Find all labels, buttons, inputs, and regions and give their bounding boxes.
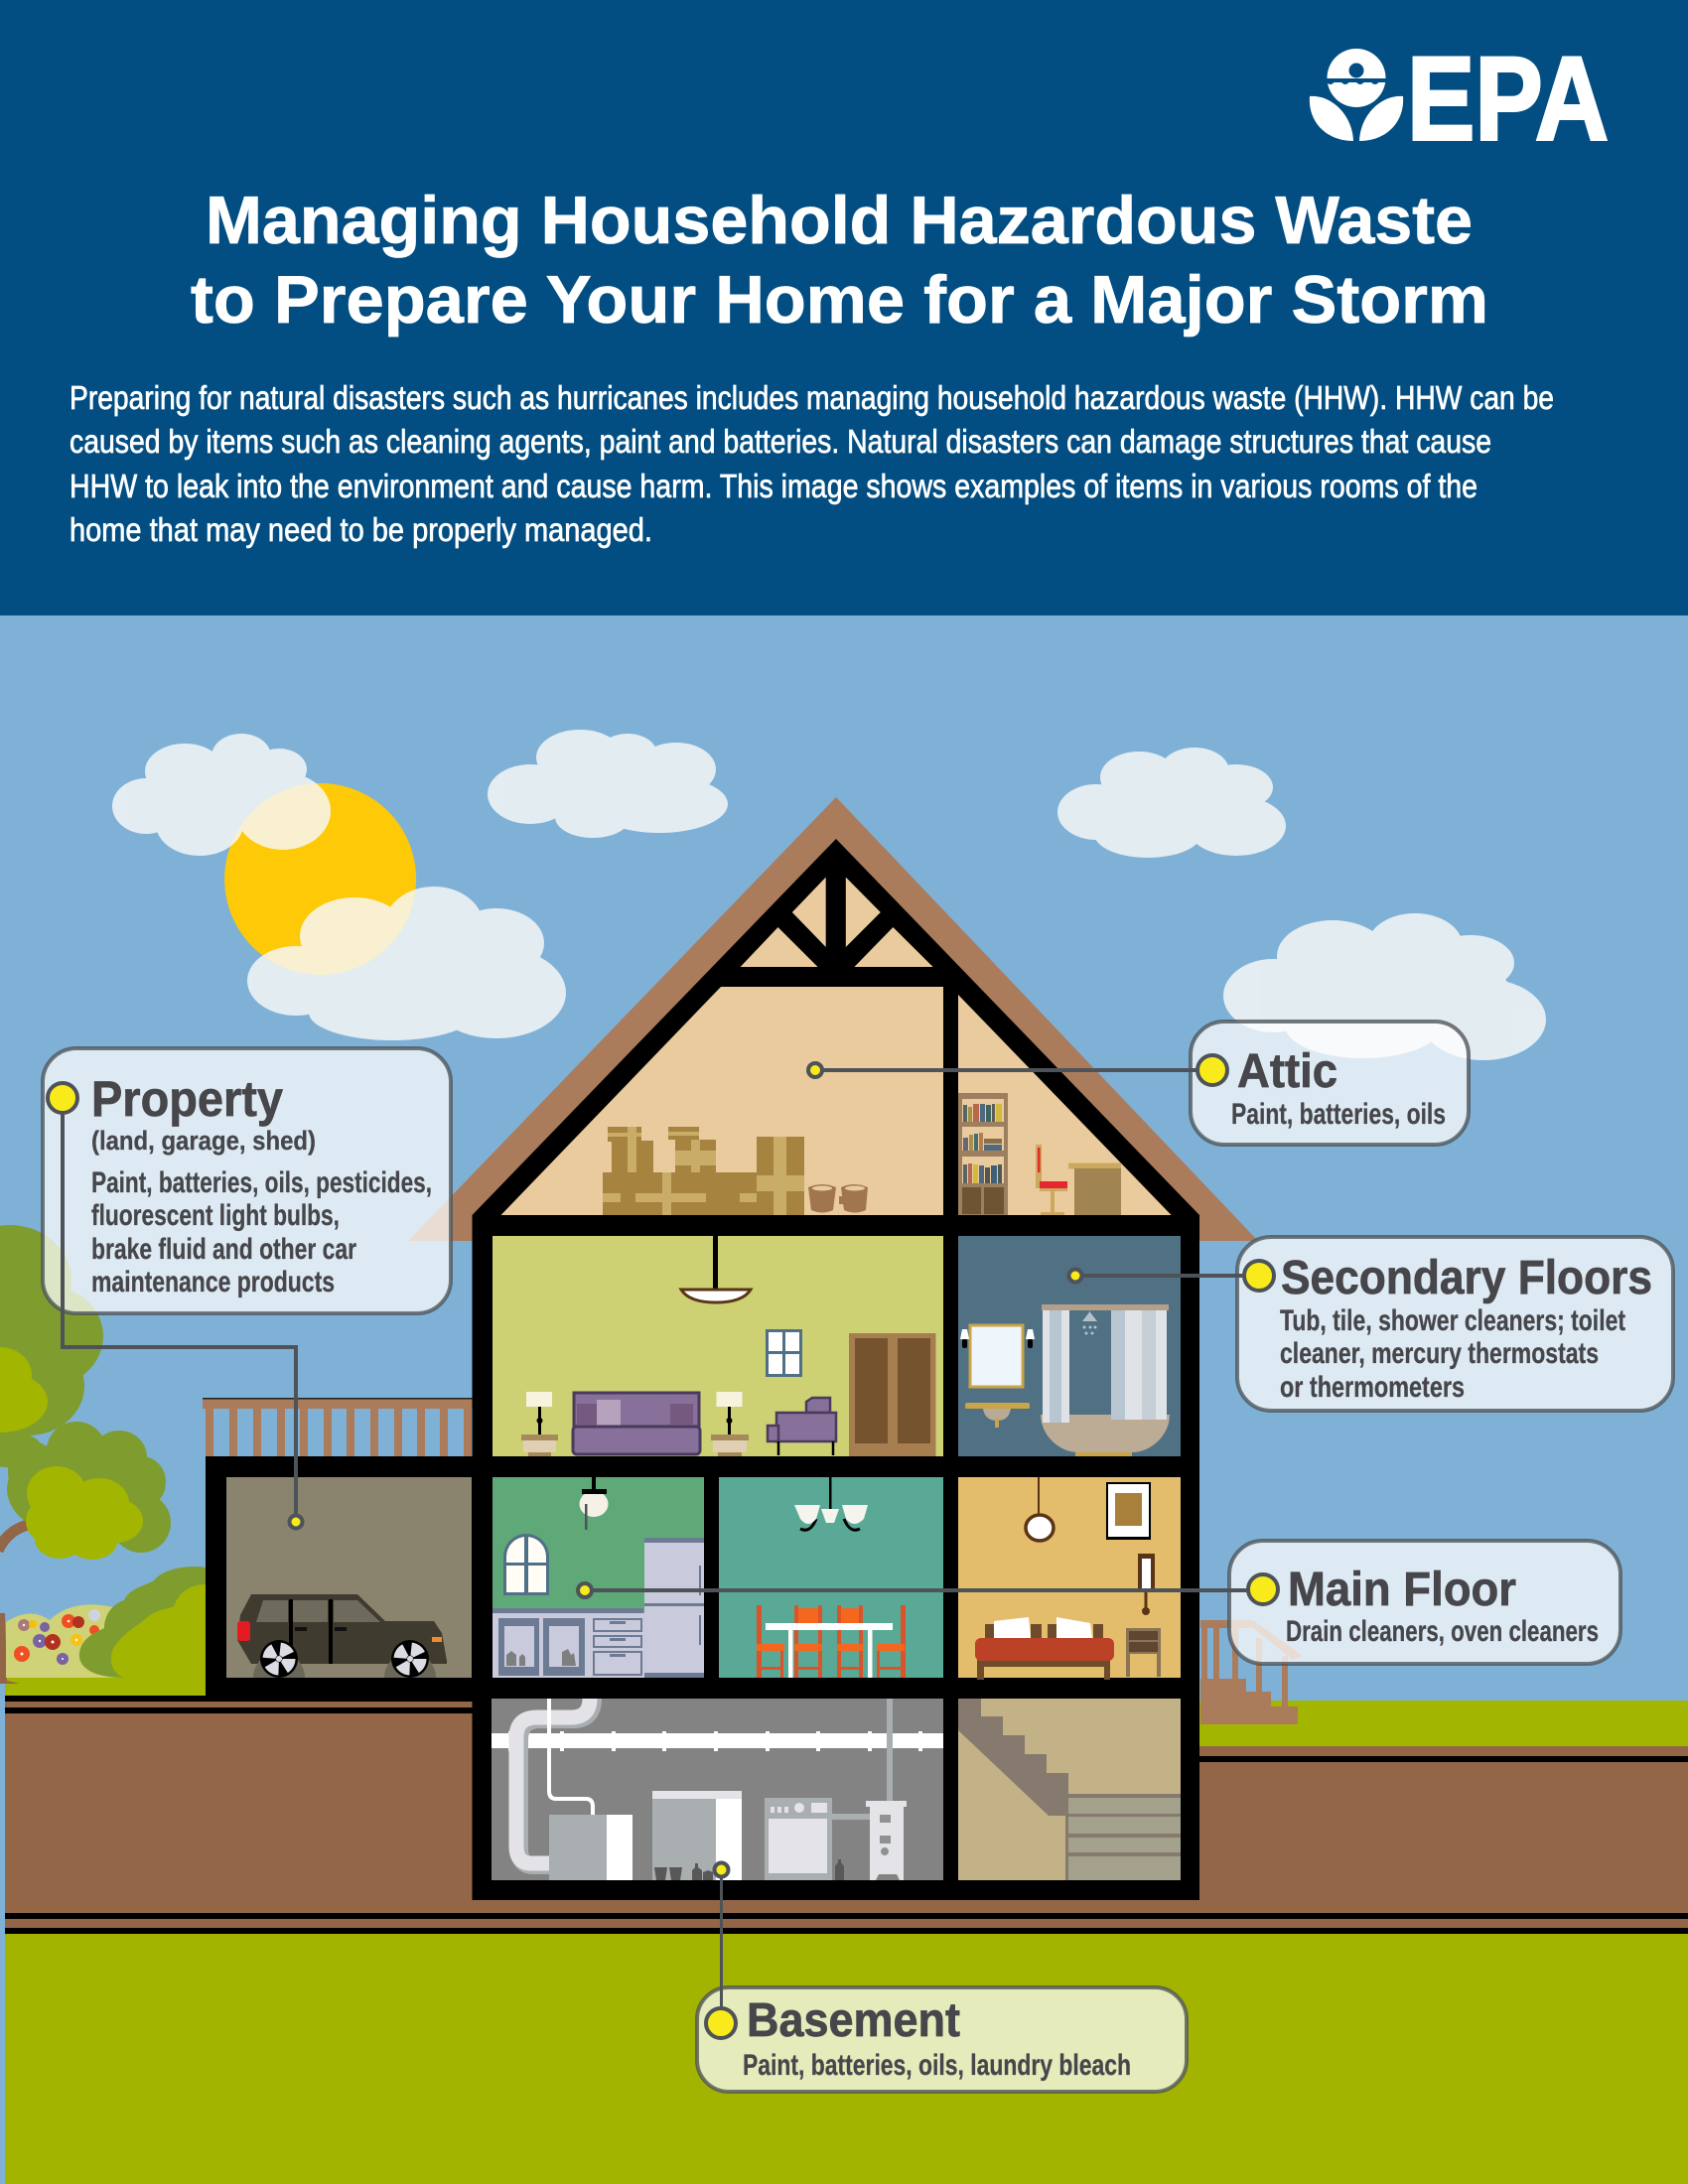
- callout: main floor: [1229, 1541, 1620, 1664]
- icon: EPA flower: [1310, 49, 1403, 141]
- callout: attic: [1191, 1022, 1469, 1145]
- icon: paint cans: [808, 1184, 868, 1213]
- callout items: [1280, 1304, 1625, 1404]
- flowers: [14, 1609, 100, 1665]
- room: basement utility: [492, 1699, 943, 1880]
- title: to Prepare Your Home for a Major Storm: [191, 262, 1488, 338]
- callout heading: Secondary Floors: [1281, 1252, 1652, 1304]
- tree: [0, 1225, 171, 1560]
- callout items: Paint, batteries, oils, pesticides,: [91, 1166, 432, 1199]
- cloud: lower over sun: [247, 887, 566, 1040]
- car body: [237, 1594, 447, 1664]
- dining chairs: [757, 1605, 906, 1678]
- callout items: Paint, batteries, oils, laundry bleach: [743, 2049, 1131, 2082]
- truss panels: [741, 878, 933, 967]
- closet doors: [849, 1333, 935, 1456]
- armchair: [768, 1398, 836, 1455]
- storage cabinet: [652, 1791, 742, 1880]
- room: living room: [492, 1236, 943, 1456]
- callout dot: [1197, 1055, 1227, 1085]
- wheels: [253, 1640, 436, 1678]
- dining table: [766, 1623, 893, 1678]
- desk: [1068, 1163, 1121, 1215]
- household chemical containers: [654, 1859, 844, 1880]
- callout items: fluorescent light bulbs,: [91, 1199, 340, 1232]
- property connector line: [63, 1114, 296, 1515]
- garage railing: [203, 1398, 473, 1457]
- water heater: [549, 1815, 633, 1880]
- marker: bathroom: [1068, 1269, 1082, 1283]
- porch stairs: [1200, 1620, 1303, 1724]
- intro paragraph: [70, 379, 1554, 548]
- cloud: right: [1223, 913, 1546, 1060]
- EPA logo: [1310, 32, 1609, 165]
- bed: [6, 1604, 139, 1678]
- right lawn: [1196, 1701, 1688, 1750]
- callout heading: Attic: [1237, 1045, 1337, 1098]
- wall thermostat: [1138, 1554, 1155, 1615]
- garage walls: [206, 1456, 474, 1696]
- nightstand: [1126, 1628, 1161, 1677]
- large duct: [516, 1699, 593, 1865]
- house structure: [206, 839, 1199, 1900]
- marker: basement: [715, 1862, 729, 1876]
- callout items: maintenance products: [91, 1266, 335, 1298]
- lower trunk: [0, 1613, 20, 1684]
- lower canopy: [7, 1422, 171, 1553]
- room: kitchen: [492, 1477, 704, 1678]
- bathtub: [1041, 1415, 1170, 1456]
- wall sconces: [960, 1329, 1035, 1348]
- side table lamp left: [521, 1392, 558, 1456]
- callout items: or thermometers: [1280, 1371, 1465, 1404]
- callout dot: [706, 2008, 736, 2038]
- lower canopy highlight: [26, 1466, 143, 1560]
- window: [766, 1329, 802, 1377]
- mirror: [970, 1325, 1023, 1387]
- sky background: [0, 614, 1688, 2184]
- room: dining room: [719, 1477, 943, 1678]
- cloud: above sun: [112, 734, 331, 856]
- soil lines: [5, 1696, 1688, 1934]
- room: bedroom: [958, 1477, 1181, 1680]
- door lines: [289, 1599, 347, 1664]
- foreground lawn: [5, 1934, 1688, 2184]
- ceiling light: [681, 1236, 751, 1302]
- ground: soil and grass: [5, 1696, 1688, 2184]
- room: attic office: [958, 995, 1172, 1215]
- sun: [224, 783, 416, 975]
- icon: car: [237, 1594, 447, 1678]
- title: [191, 183, 1488, 338]
- intro paragraph: home that may need to be properly managed.: [70, 511, 652, 548]
- secondary floors connector line: [1082, 1274, 1243, 1278]
- callout: property: [43, 1048, 451, 1313]
- car windows: [256, 1600, 380, 1622]
- roof: [408, 797, 1258, 1241]
- house walls: [473, 839, 1199, 1900]
- callout items: [91, 1166, 432, 1298]
- upper canopy highlight: [0, 1347, 48, 1433]
- furnace: [866, 1699, 907, 1880]
- chandelier: [794, 1477, 868, 1530]
- callout: basement: [697, 1987, 1187, 2092]
- shower head: [1082, 1310, 1097, 1334]
- callout subheading: (land, garage, shed): [91, 1126, 316, 1156]
- cloud: upper middle: [488, 730, 728, 838]
- cabinets: [492, 1608, 644, 1678]
- hanging lamp: [1026, 1477, 1054, 1541]
- callout items: cleaner, mercury thermostats: [1280, 1337, 1599, 1370]
- arched window: [503, 1534, 549, 1595]
- white beam: [492, 1731, 943, 1751]
- callout dot: [1244, 1261, 1274, 1291]
- ground grass left: [5, 1676, 209, 1700]
- marker: garage: [290, 1515, 302, 1529]
- marker: attic: [808, 1063, 822, 1077]
- intro paragraph: HHW to leak into the environment and cause harm. This image shows examples of items in various rooms of the: [70, 468, 1477, 504]
- attic connector line: [823, 1068, 1196, 1072]
- room: bathroom: [958, 1236, 1181, 1456]
- callout heading: Basement: [747, 1994, 960, 2047]
- white water pipe: [549, 1699, 593, 1815]
- flower bed: [0, 1604, 139, 1684]
- callout heading: Property: [91, 1071, 283, 1127]
- sink: [965, 1403, 1030, 1428]
- lights: [237, 1621, 250, 1641]
- cloud: upper right: [1057, 748, 1286, 858]
- upper canopy: [0, 1225, 103, 1467]
- marker: kitchen: [578, 1583, 592, 1597]
- refrigerator: [644, 1538, 704, 1678]
- title: Managing Household Hazardous Waste: [206, 183, 1473, 258]
- soil: [5, 1696, 1688, 1934]
- room: attic storage: [500, 987, 943, 1215]
- lower steps: [1065, 1794, 1181, 1880]
- callout items: brake fluid and other car: [91, 1233, 356, 1266]
- callout dot: [48, 1083, 77, 1113]
- desk chair: [1036, 1145, 1067, 1215]
- header band: [0, 0, 1688, 615]
- bed: [975, 1617, 1114, 1680]
- callout: secondary floors: [1237, 1237, 1673, 1411]
- icon: cardboard boxes: [603, 1127, 804, 1215]
- intro paragraph: caused by items such as cleaning agents, paint and batteries. Natural disasters can damage structures that cause: [70, 423, 1491, 460]
- clouds: [112, 730, 1546, 1060]
- callout heading: Main Floor: [1288, 1564, 1516, 1616]
- main floor connector line: [592, 1588, 1247, 1592]
- sofa: [573, 1393, 700, 1454]
- pendant lamp: [580, 1477, 608, 1530]
- callout dot: [1248, 1574, 1278, 1604]
- basement connector line: [720, 1877, 723, 2007]
- washer: [765, 1798, 870, 1880]
- bookcase: [958, 1093, 1008, 1215]
- bush: [79, 1567, 206, 1678]
- callout items: Paint, batteries, oils: [1231, 1098, 1446, 1131]
- shower curtains: [1042, 1304, 1169, 1423]
- staircase: [958, 1699, 1068, 1816]
- room: garage: [226, 1477, 472, 1678]
- framed picture: [1106, 1482, 1151, 1540]
- tree trunk: [0, 1524, 32, 1551]
- side table lamp right: [711, 1392, 749, 1456]
- EPA wordmark: EPA: [1407, 32, 1609, 165]
- room: basement stairs: [958, 1699, 1181, 1880]
